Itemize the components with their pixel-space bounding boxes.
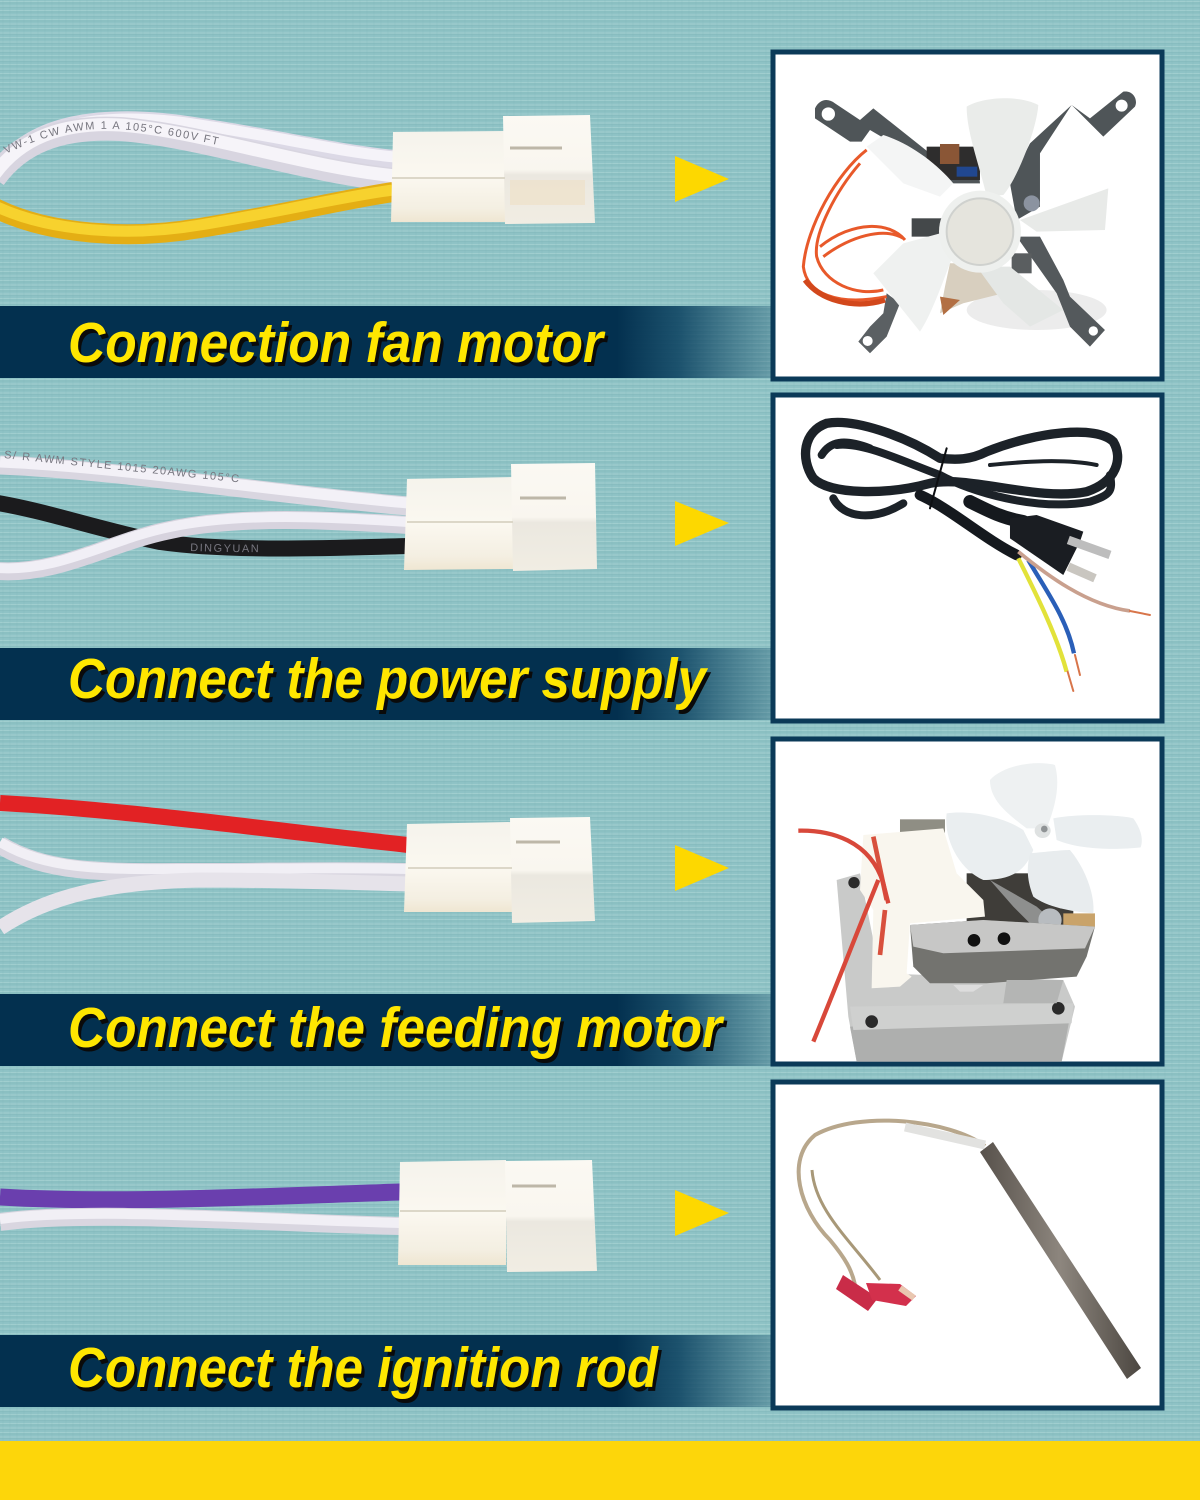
panel: ignition rod photo	[773, 1082, 1162, 1408]
arrow 1	[675, 156, 729, 202]
row 2: connector with white and black wires: DINGYUAN	[191, 544, 258, 552]
row 4: connector with purple and white wires	[0, 1160, 597, 1272]
banner 4	[0, 1335, 771, 1407]
row 3: connector with red and white wires	[0, 803, 595, 928]
heading 2: Connect the power supply	[68, 647, 709, 711]
panel: fan motor photo	[773, 52, 1162, 379]
power cord artwork	[806, 422, 1150, 691]
arrow 4	[675, 1190, 729, 1236]
row 1: connector with white and yellow wires: VW-1 CW AWM 1 A 105°C 600V FT	[3, 121, 219, 152]
row 1: connector with white and yellow wires	[0, 111, 595, 244]
banner 3	[0, 994, 771, 1066]
heading 3: Connect the feeding motor	[68, 996, 725, 1060]
ignition rod artwork	[799, 1121, 1141, 1379]
panel: power cord photo	[773, 395, 1162, 721]
heading 4: Connect the ignition rod	[68, 1336, 659, 1400]
arrow 2	[675, 501, 729, 546]
bottom yellow bar	[0, 1441, 1200, 1500]
feeding motor artwork	[798, 763, 1142, 1062]
fan motor artwork	[803, 91, 1136, 353]
row 2: connector with white and black wires: S/ R AWM STYLE 1015 20AWG 105°C	[4, 450, 239, 482]
arrow 3	[675, 845, 729, 891]
banner 2	[0, 647, 771, 720]
row 2: connector with white and black wires	[0, 450, 597, 580]
panel: feeding motor photo	[773, 739, 1162, 1064]
banner 1	[0, 306, 771, 378]
heading 1: Connection fan motor	[68, 311, 606, 375]
